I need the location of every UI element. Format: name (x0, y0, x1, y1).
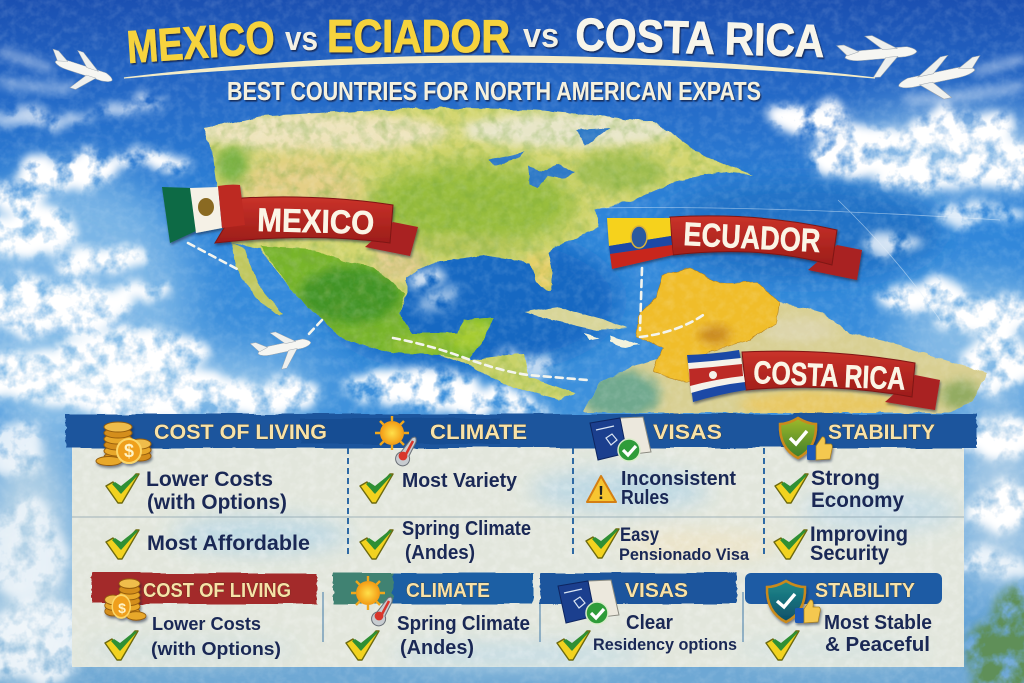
column: stability, bottom (766, 580, 932, 660)
column: cost of living, bottom: COST OF LIVING (143, 580, 291, 602)
column: cost of living, top: COST OF LIVING (154, 421, 327, 444)
column: stability, top (774, 418, 935, 565)
column: cost of living, top (96, 421, 327, 559)
icon: coins: $ (124, 441, 134, 461)
column: visas, bottom (557, 580, 737, 660)
comparison table panel (72, 428, 964, 667)
column: visas, top: VISAS (653, 421, 722, 444)
dashed flight routes (188, 243, 706, 380)
banner: Costa Rica: COSTA RICA (753, 354, 906, 397)
column: climate, top (360, 416, 531, 564)
column: visas, top: Rules (621, 487, 669, 509)
column: cost of living, bottom: Lower Costs (152, 614, 261, 634)
banner: Costa Rica (687, 350, 940, 410)
header band: climate lower (333, 573, 533, 604)
plane: top right upper (836, 32, 919, 81)
icon: shield (767, 581, 820, 623)
table grid lines (72, 428, 964, 642)
title: vs (523, 17, 559, 55)
column: climate, bottom: CLIMATE (406, 580, 490, 602)
icon: passport (558, 580, 619, 624)
column: stability, top: Security (810, 542, 889, 565)
icon: sun and thermometer (351, 576, 392, 626)
column: cost of living, top: Most Affordable (147, 532, 310, 555)
column: climate, bottom (346, 576, 530, 660)
curved meridian lines (600, 200, 1000, 320)
header band: Costa Rica row cost of living (92, 573, 317, 604)
plane: top left with contrail (0, 43, 118, 99)
map: Baja, lakes and islands (231, 128, 640, 348)
column: climate, bottom: (Andes) (400, 637, 474, 659)
column: cost of living, bottom (105, 579, 291, 660)
icon: warning (587, 476, 616, 503)
banner: Ecuador: ECUADOR (683, 215, 822, 259)
column: climate, top: (Andes) (405, 542, 475, 564)
flag: Costa Rica (687, 350, 746, 402)
header band: top row (66, 414, 977, 448)
plane: top right lower with contrail (895, 49, 1024, 108)
column: stability, bottom: & Peaceful (825, 634, 930, 656)
column: climate, top: CLIMATE (430, 421, 527, 444)
title: ECIADOR (327, 10, 510, 62)
title: MEXICO (125, 11, 276, 73)
column: visas, top (586, 417, 750, 564)
column: visas, top: Inconsistent (621, 468, 736, 490)
header band: visas lower (540, 573, 737, 604)
column: stability, top: Economy (811, 489, 904, 512)
column: stability, top: Improving (810, 523, 908, 546)
map: South America and Ecuador (580, 268, 1000, 420)
column: cost of living, bottom: (with Options) (151, 639, 281, 659)
column: visas, bottom: Residency options (593, 635, 737, 654)
title underline swoosh (124, 56, 875, 78)
column: cost of living, top: Lower Costs (146, 468, 273, 491)
banner: Mexico (162, 185, 418, 256)
title: COSTA RICA (575, 8, 825, 67)
column: visas, bottom: VISAS (625, 580, 688, 602)
column: climate, top: Spring Climate (402, 518, 531, 540)
banner: Mexico: MEXICO (257, 201, 375, 241)
column: visas, top: Easy (620, 525, 659, 546)
column: stability, top: Strong (811, 467, 880, 490)
icon: warning: ! (598, 483, 604, 503)
column: visas, bottom: Clear (626, 612, 673, 634)
banner: Ecuador (607, 215, 862, 280)
column: visas, top: Pensionado Visa (619, 545, 750, 564)
map corner: bottom-right land (965, 592, 1024, 683)
icon: coins (105, 579, 146, 620)
subtitle: BEST COUNTRIES FOR NORTH AMERICAN EXPATS (227, 76, 761, 106)
icon: shield (780, 418, 832, 460)
flag: Mexico (162, 185, 245, 243)
flag: Ecuador (607, 218, 673, 269)
map: North America (204, 106, 753, 400)
title: vs (285, 20, 318, 58)
column: cost of living, top: (with Options) (147, 491, 287, 514)
column: stability, bottom: Most Stable (824, 612, 932, 634)
icon: coins: $ (118, 600, 126, 616)
column: stability, top: STABILITY (828, 421, 935, 444)
column: stability, bottom: STABILITY (815, 580, 916, 602)
icon: coins (96, 422, 151, 466)
column: climate, top: Most Variety (402, 470, 518, 492)
plane: Mexico route (249, 325, 315, 374)
icon: passport (590, 417, 651, 461)
title (125, 8, 825, 73)
column: climate, bottom: Spring Climate (397, 613, 530, 635)
header band: stability lower (745, 573, 942, 604)
icon: sun and thermometer (375, 416, 416, 466)
